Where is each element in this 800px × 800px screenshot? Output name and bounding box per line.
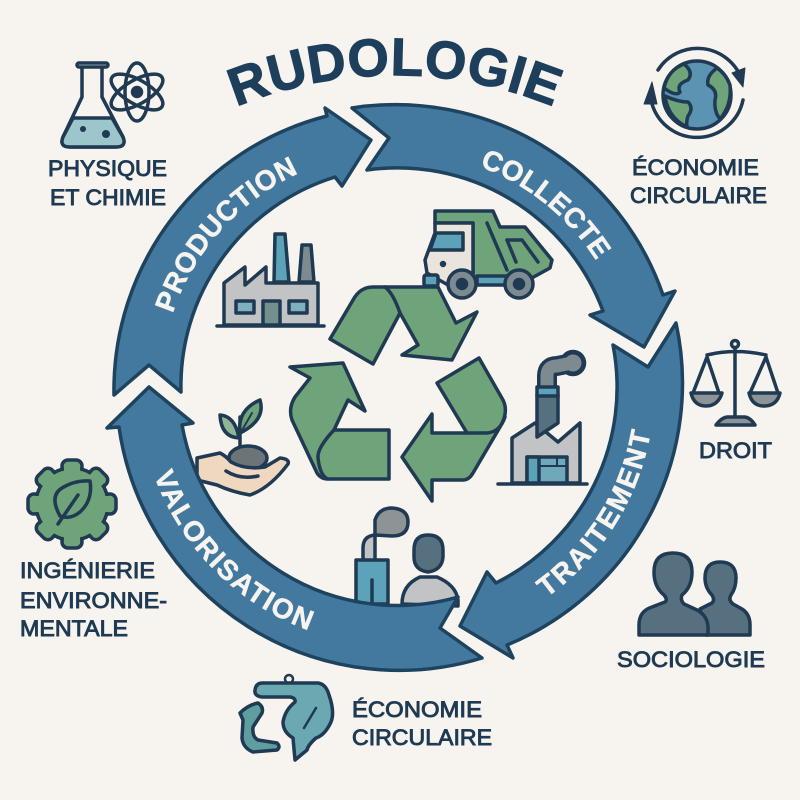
icon: factory — [217, 234, 324, 326]
title: RUDOLOGIE — [226, 38, 564, 106]
icon: atom — [106, 63, 168, 121]
discipline: économie circulaire (haut) — [630, 48, 767, 208]
label: production: PRODUCTION — [154, 156, 298, 312]
text: ingénierie environnementale: MENTALE — [20, 616, 128, 641]
label: traitement: TRAITEMENT — [534, 428, 650, 594]
icon: scales — [691, 340, 780, 425]
arrow: valorisation — [105, 385, 484, 672]
label: collecte: COLLECTE — [483, 151, 612, 260]
discipline: physique et chimie — [48, 63, 168, 210]
icon: person with microphone — [356, 508, 458, 606]
recycling arrow: right — [402, 358, 505, 501]
text: physique et chimie: PHYSIQUE — [48, 156, 167, 181]
text: économie circulaire: ÉCONOMIE — [632, 155, 759, 180]
discipline: économie circulaire (bas) — [240, 675, 492, 760]
icon: two people — [639, 553, 750, 635]
text: économie circulaire: CIRCULAIRE — [630, 183, 767, 208]
text: physique et chimie: ET CHIMIE — [50, 185, 166, 210]
discipline: sociologie — [617, 553, 765, 672]
recycling arrow: left — [290, 363, 389, 479]
label: valorisation: VALORISATION — [156, 468, 314, 630]
recycling arrow: top — [330, 287, 477, 364]
icon: hand holding plant — [197, 400, 288, 495]
text: sociologie: SOCIOLOGIE — [617, 647, 765, 672]
text: physique et chimie — [48, 156, 167, 210]
text: économie circulaire: ÉCONOMIE — [352, 697, 482, 722]
icon: flask — [62, 63, 124, 147]
text: ingénierie environnementale: INGÉNIERIE — [20, 558, 155, 583]
discipline: ingénierie environnementale — [20, 460, 167, 641]
text: économie circulaire — [352, 697, 492, 750]
text: économie circulaire — [630, 155, 767, 208]
icon: gear with leaf — [28, 460, 116, 548]
arrow: production — [112, 106, 373, 397]
icon: garbage truck — [424, 211, 552, 298]
icon: treatment plant — [498, 352, 587, 484]
text: ingénierie environnementale: ENVIRONNE- — [20, 588, 167, 613]
text: économie circulaire: CIRCULAIRE — [352, 725, 492, 750]
icon: globe with arrows — [644, 48, 745, 137]
arrow: collecte — [350, 102, 677, 349]
icon: recycling symbol — [290, 287, 505, 501]
discipline: droit — [691, 340, 780, 463]
arrow: traitement — [458, 321, 684, 660]
text: droit: DROIT — [699, 438, 772, 463]
text: ingénierie environnementale — [20, 558, 167, 641]
icon: circular economy blob — [240, 675, 333, 760]
